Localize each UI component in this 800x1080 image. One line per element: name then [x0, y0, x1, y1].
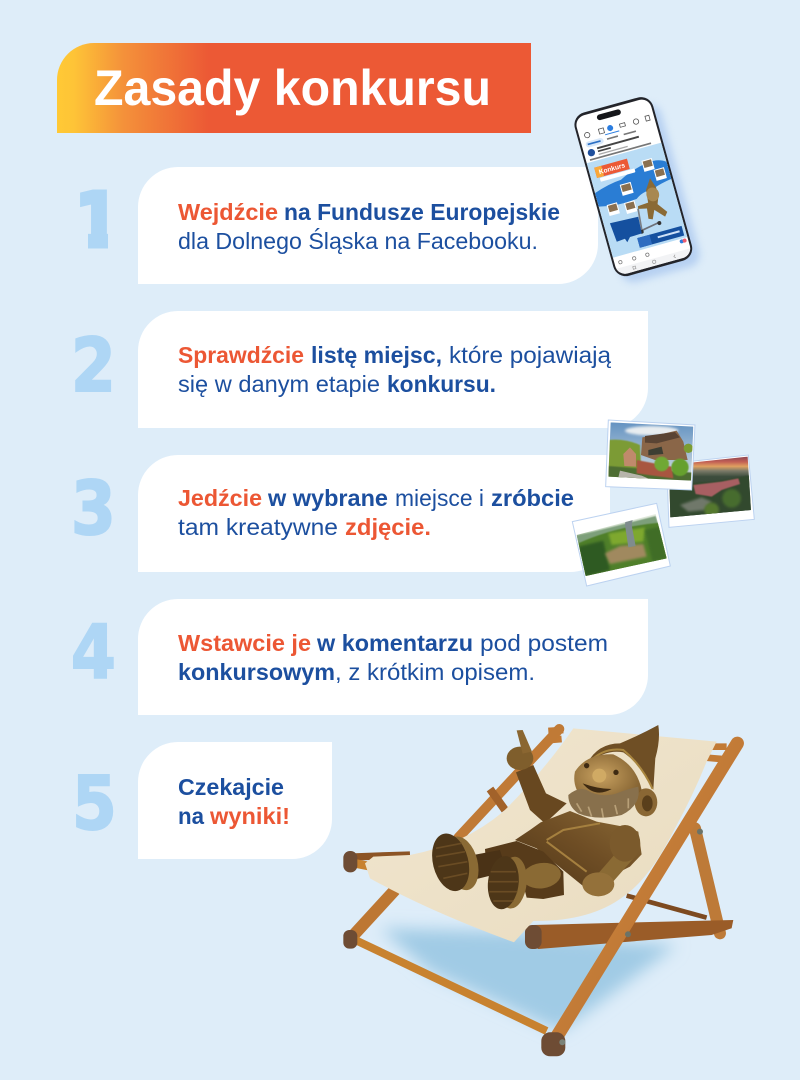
canvas seat — [365, 728, 717, 942]
step 5 text: Czekajcie — [178, 774, 284, 800]
lowered arm — [605, 852, 628, 878]
photo: forest tower — [572, 503, 672, 586]
panel: step 5 — [138, 742, 332, 859]
beard strands — [577, 798, 628, 818]
hat brim — [586, 749, 653, 789]
lowered hand — [582, 872, 614, 896]
panel: step 3 — [138, 455, 610, 572]
step 4 text — [178, 630, 608, 685]
top rails — [548, 730, 727, 759]
phone shadow — [580, 102, 703, 285]
step 2 text: Sprawdźcie — [178, 342, 304, 368]
step 4 card — [138, 599, 648, 715]
phone screen content: Konkurs — [598, 162, 626, 176]
phone device — [572, 94, 695, 279]
step 3 text — [178, 485, 574, 540]
shin right highlight — [521, 860, 563, 891]
step 4 text: pod postem — [480, 630, 608, 656]
step 2 card — [138, 311, 648, 428]
step 1 text: na Fundusze Europejskie — [284, 199, 560, 225]
nose — [592, 769, 606, 783]
step 2 text: które pojawiają — [449, 342, 611, 368]
step 3 text: zróbcie — [491, 485, 574, 511]
shin left — [473, 850, 507, 879]
step 2 text: się w danym etapie — [178, 371, 380, 397]
photo collage — [572, 420, 754, 586]
step 1 text: Wejdźcie — [178, 199, 278, 225]
title banner — [57, 43, 531, 133]
beard — [568, 787, 639, 818]
raised hand — [507, 730, 533, 770]
step 5 text: wyniki! — [209, 803, 290, 829]
step 5 text: na — [178, 803, 204, 829]
step 2 text: konkursu. — [387, 371, 496, 397]
step 4 text: Wstawcie je — [178, 630, 311, 656]
back support leg — [695, 828, 720, 933]
step 3 text: miejsce i — [395, 485, 484, 511]
speech bubble — [610, 216, 642, 242]
step 1 card — [138, 167, 598, 284]
panel: step 4 — [138, 599, 648, 715]
number 4: 4 — [71, 611, 116, 696]
step 4 text: w komentarzu — [316, 630, 473, 656]
raised arm — [516, 765, 567, 823]
tiny gnome on scooter — [637, 178, 668, 234]
tiny photos — [606, 158, 667, 216]
panel: step 2 — [138, 311, 648, 428]
ear — [635, 788, 657, 816]
hat — [586, 725, 659, 790]
face — [574, 754, 642, 802]
chair shadow — [380, 928, 677, 1032]
eyes — [584, 763, 619, 775]
panel: step 1 — [138, 167, 598, 284]
step 3 text: Jedźcie — [178, 485, 262, 511]
number 1: 1 — [75, 179, 120, 264]
banner gradient shape — [57, 43, 531, 133]
gnome on deckchair illustration — [343, 725, 737, 1056]
shirt hem highlight — [547, 823, 600, 872]
right shoe — [485, 855, 529, 911]
title: Zasady konkursu — [94, 60, 491, 116]
step 3 text: zdjęcie. — [345, 514, 431, 540]
konkurs banner — [594, 159, 630, 178]
funding banner — [637, 226, 684, 248]
long front leg — [541, 743, 737, 1056]
left arm — [352, 855, 410, 857]
sleeve — [610, 825, 640, 862]
step 4 text: , z krótkim opisem. — [335, 659, 535, 685]
step 1 text: dla Dolnego Śląska na Facebooku. — [178, 227, 538, 254]
step 4 text: konkursowym — [178, 659, 335, 685]
step 1 text — [178, 199, 560, 254]
rear strut — [627, 896, 707, 918]
post image — [587, 143, 687, 258]
map blob — [595, 160, 672, 207]
left back rail — [458, 729, 559, 838]
phone screen content — [584, 109, 690, 274]
number 2: 2 — [71, 324, 116, 409]
phone illustration — [572, 94, 703, 285]
gnome statue — [426, 725, 659, 911]
reactions and navigation — [618, 253, 649, 264]
step 3 text: w wybrane — [267, 485, 388, 511]
step 2 text — [178, 342, 611, 397]
left shoe — [426, 830, 484, 895]
shorts — [485, 841, 564, 899]
front rail — [352, 938, 547, 1031]
step 3 card — [138, 455, 610, 572]
front leg — [351, 890, 395, 938]
step 5 card — [138, 742, 332, 859]
step 3 text: tam kreatywne — [178, 514, 338, 540]
smile — [583, 783, 612, 793]
number 3: 3 — [71, 467, 116, 552]
cross rail — [527, 920, 733, 949]
shirt — [515, 811, 642, 892]
step 5 text — [178, 774, 290, 829]
photo: castle at sunset — [665, 453, 754, 527]
deckchair frame — [343, 729, 733, 1031]
number 5: 5 — [72, 762, 117, 847]
step 2 text: listę miejsc, — [311, 342, 442, 368]
photo: wooden house — [605, 420, 695, 490]
